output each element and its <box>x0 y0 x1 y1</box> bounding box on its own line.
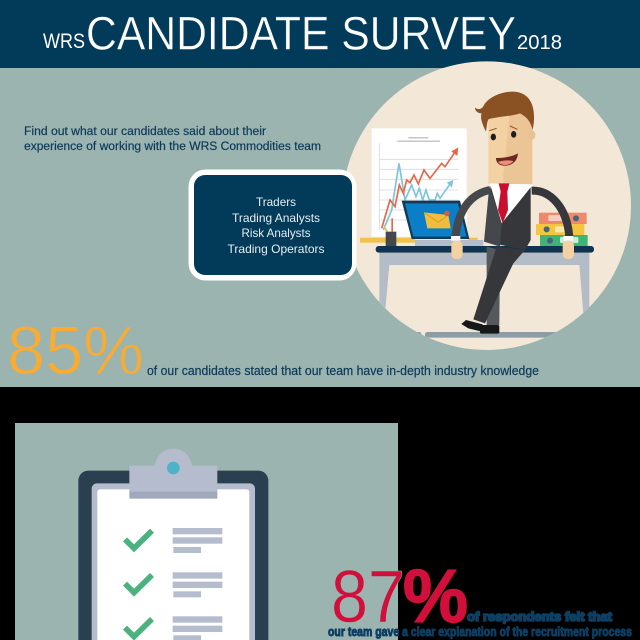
statistic caption, first line: of respondents felt that <box>467 610 613 624</box>
clip <box>129 449 217 499</box>
job roles box <box>188 170 356 280</box>
tie <box>498 183 509 223</box>
pencil cup <box>383 218 396 246</box>
87 percent statistic: 87 <box>331 555 405 638</box>
checklist row 3 <box>125 616 222 640</box>
lower panel <box>15 423 398 640</box>
top survey section background <box>0 68 640 387</box>
checklist row 2 <box>125 572 222 597</box>
title: 2018 <box>517 32 562 54</box>
laptop <box>402 201 483 246</box>
desk and floor <box>360 246 594 338</box>
man <box>451 92 574 334</box>
arms <box>456 190 490 237</box>
statistic caption: of our candidates stated that our team have in-depth industry knowledge <box>147 364 539 378</box>
legs <box>487 247 500 325</box>
title: CANDIDATE SURVEY <box>86 6 516 60</box>
85 percent statistic: 85% <box>7 312 144 389</box>
shoes <box>461 320 483 332</box>
intro text <box>24 124 321 153</box>
neck and face <box>488 110 532 184</box>
eyes and brows <box>491 134 496 140</box>
illustration: businessman at desk in circle <box>342 61 631 350</box>
job roles list: Trading Analysts <box>232 211 320 225</box>
hands <box>451 241 463 259</box>
yellow paper <box>360 238 415 243</box>
job roles list: Risk Analysts <box>242 226 310 240</box>
mouth <box>496 153 518 166</box>
title: WRS <box>43 30 85 53</box>
chart poster <box>372 128 467 237</box>
job roles list: Trading Operators <box>228 242 324 256</box>
intro text: Find out what our candidates said about their <box>24 124 266 138</box>
hair <box>475 92 534 132</box>
icon: clipboard checklist <box>78 449 268 640</box>
87 percent statistic <box>328 554 632 639</box>
job roles list: Traders <box>256 195 296 209</box>
checklist row 1 <box>125 528 222 553</box>
87 percent statistic: % <box>403 554 468 638</box>
job roles list <box>228 195 324 256</box>
shirt <box>489 183 532 223</box>
circle backdrop <box>342 61 631 350</box>
85 percent statistic <box>7 312 539 389</box>
intro text: experience of working with the WRS Commodities team <box>24 139 321 153</box>
cuffs <box>451 236 460 241</box>
jacket <box>485 186 531 250</box>
header banner <box>0 0 640 68</box>
binders <box>536 213 588 246</box>
